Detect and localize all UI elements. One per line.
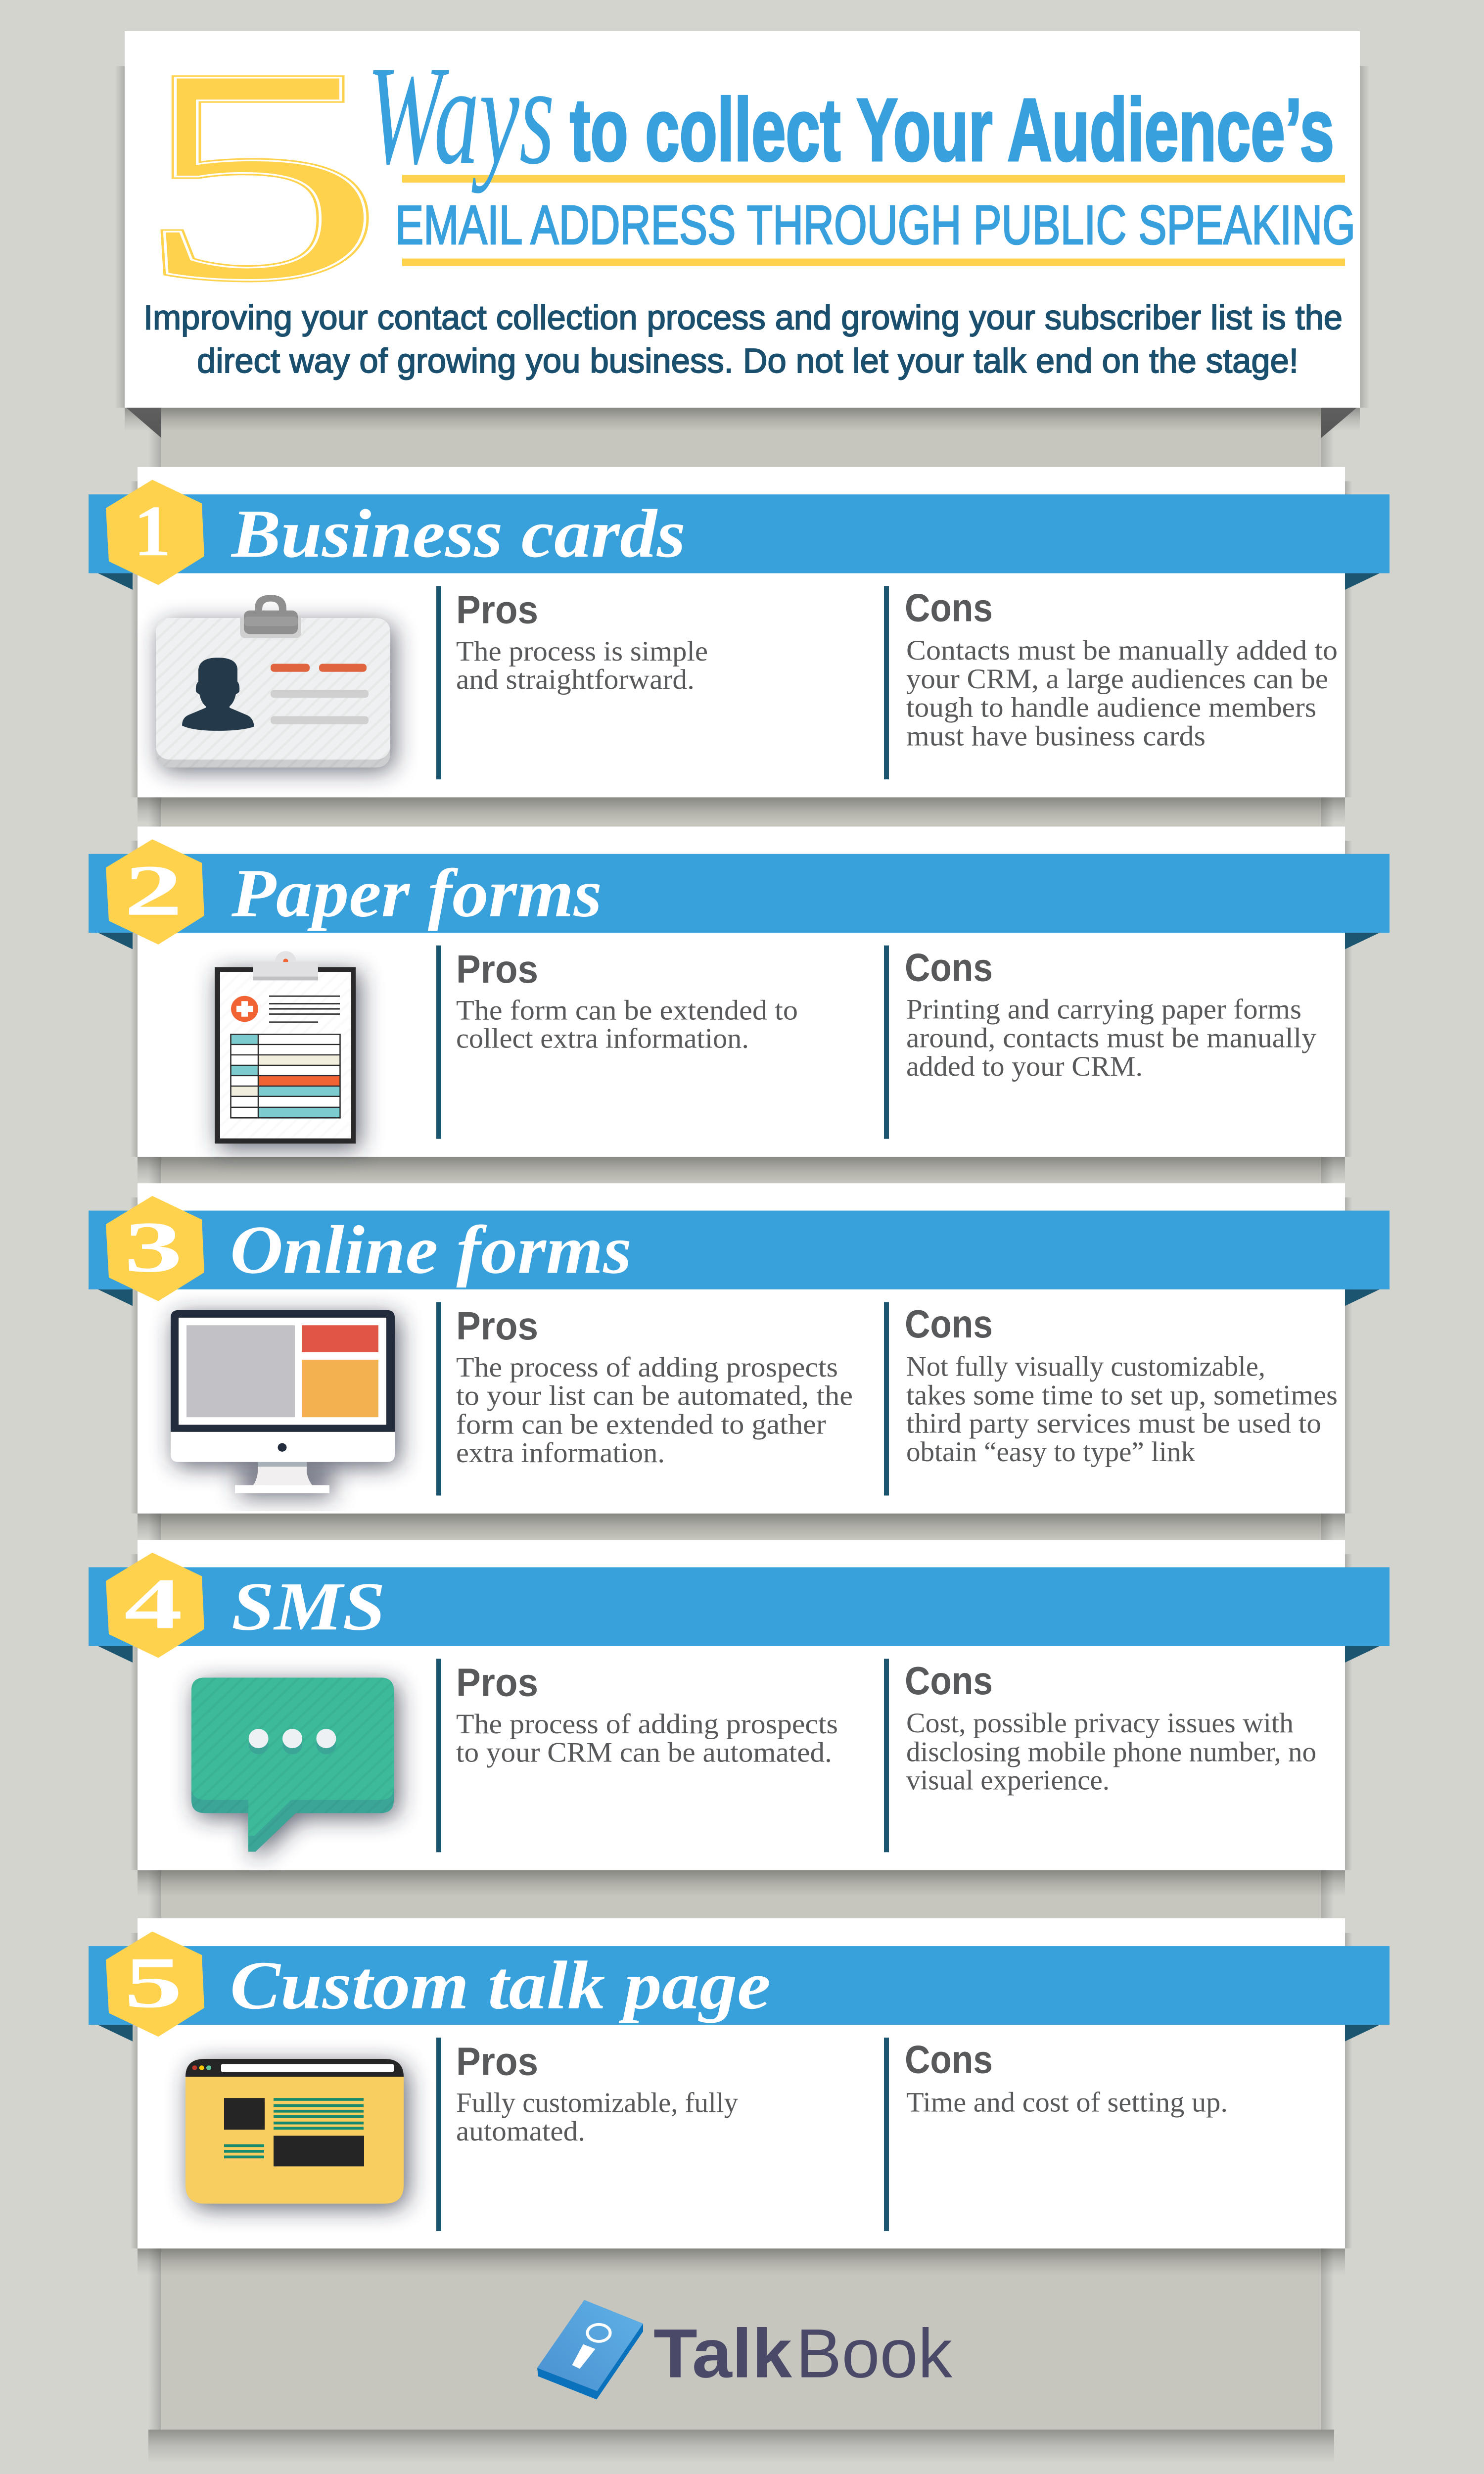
icon: browser window — [186, 2059, 408, 2208]
back column — [148, 71, 1334, 2463]
ribbon fold right — [1345, 2025, 1380, 2042]
cons text: added to your CRM. — [906, 1050, 1143, 1082]
panel: SMS — [89, 1540, 1390, 1897]
pros heading: Pros — [456, 1304, 538, 1348]
cons text: tough to handle audience members — [906, 692, 1316, 723]
icon: desktop monitor — [171, 1310, 399, 1498]
panel: online forms — [89, 1183, 1390, 1540]
cons text: Time and cost of setting up. — [906, 2087, 1228, 2118]
section title: Online forms — [230, 1212, 632, 1288]
number 4: 4 — [124, 1564, 183, 1644]
pros divider — [436, 1302, 441, 1496]
card background — [138, 1540, 1345, 1870]
cons divider — [884, 1659, 889, 1852]
cons heading: Cons — [905, 2038, 993, 2082]
header panel — [115, 6, 1370, 438]
cons heading: Cons — [905, 1302, 993, 1346]
pros text: Fully customizable, fully — [456, 2087, 739, 2118]
number hexagon — [106, 1196, 204, 1301]
pros text: to your list can be automated, the — [456, 1380, 853, 1411]
number hexagon — [106, 1553, 204, 1658]
cons text — [906, 1351, 1338, 1468]
pros text: automated. — [456, 2115, 585, 2147]
cons text: your CRM, a large audiences can be — [906, 663, 1328, 695]
cons text — [906, 634, 1338, 752]
pros heading: Pros — [456, 948, 538, 992]
ribbon fold left — [98, 1646, 133, 1663]
banner — [89, 1567, 1390, 1646]
panel: custom talk page — [89, 1918, 1390, 2275]
icon: clipboard form — [215, 951, 360, 1148]
cons text: Cost, possible privacy issues with — [906, 1707, 1294, 1739]
pros text: The form can be extended to — [456, 995, 798, 1026]
card background — [138, 1183, 1345, 1514]
yellow rule bottom — [402, 259, 1345, 266]
cons text: visual experience. — [906, 1764, 1110, 1796]
banner — [89, 494, 1390, 573]
header background — [125, 31, 1360, 408]
pros heading: Pros — [456, 1661, 538, 1705]
pros text: The process of adding prospects — [456, 1708, 838, 1740]
banner — [89, 854, 1390, 933]
pros text: The process of adding prospects — [456, 1351, 838, 1383]
ribbon fold left — [98, 2025, 133, 2042]
pros heading: Pros — [456, 2040, 538, 2084]
pros text: collect extra information. — [456, 1023, 749, 1054]
logo: TalkBook — [537, 2300, 953, 2399]
number 3: 3 — [124, 1207, 183, 1287]
number hexagon — [106, 1932, 204, 2037]
cons heading: Cons — [905, 586, 993, 630]
cons text: takes some time to set up, sometimes — [906, 1380, 1338, 1411]
cons divider — [884, 2038, 889, 2231]
pros text: form can be extended to gather — [456, 1409, 826, 1440]
pros text: extra information. — [456, 1437, 665, 1468]
title word: Ways: Ways — [367, 37, 555, 194]
section title: Paper forms — [231, 855, 602, 931]
banner — [89, 1211, 1390, 1289]
cons text: must have business cards — [906, 720, 1206, 752]
cons text — [906, 1707, 1316, 1796]
pros text: and straightforward. — [456, 664, 695, 695]
yellow rule top — [402, 175, 1345, 183]
cons divider — [884, 946, 889, 1139]
number hexagon — [106, 839, 204, 945]
cons text: Not fully visually customizable, — [906, 1351, 1265, 1382]
pros text: The process is simple — [456, 635, 708, 667]
panel: business cards — [89, 467, 1390, 824]
logo wordmark: Talk — [653, 2315, 792, 2392]
icon: chat bubble — [191, 1678, 398, 1856]
pros heading: Pros — [456, 588, 538, 632]
number 5: 5 — [124, 1942, 183, 2023]
pros text — [456, 635, 708, 695]
ribbon fold right — [1345, 1646, 1380, 1663]
pros text: to your CRM can be automated. — [456, 1737, 832, 1768]
cons text: Contacts must be manually added to — [906, 634, 1338, 666]
number 2: 2 — [124, 850, 183, 931]
section title: SMS — [232, 1568, 385, 1645]
pros text — [456, 1351, 853, 1468]
cons text: disclosing mobile phone number, no — [906, 1736, 1316, 1767]
panel: paper forms — [89, 826, 1390, 1183]
right header fold — [1321, 408, 1357, 438]
banner — [89, 1946, 1390, 2025]
section title: Business cards — [231, 495, 686, 571]
ribbon fold right — [1345, 933, 1380, 949]
icon: ID badge — [156, 595, 394, 771]
pros divider — [436, 586, 441, 779]
ribbon fold right — [1345, 1289, 1380, 1306]
pros divider — [436, 1659, 441, 1852]
cons heading: Cons — [905, 1659, 993, 1703]
cons divider — [884, 1302, 889, 1496]
logo wordmark: Book — [796, 2315, 953, 2392]
big number 5: 5 — [136, 6, 384, 343]
ribbon fold left — [98, 1289, 133, 1306]
cons text: third party services must be used to — [906, 1408, 1321, 1439]
cons text — [906, 994, 1317, 1082]
pros text — [456, 2087, 739, 2147]
ribbon fold left — [98, 573, 133, 590]
card background — [138, 1918, 1345, 2248]
pros divider — [436, 2038, 441, 2231]
intro line 1: Improving your contact collection process and growing your subscriber list is the — [143, 298, 1343, 337]
number hexagon — [106, 480, 204, 585]
cons divider — [884, 586, 889, 779]
pros text — [456, 995, 798, 1054]
section title: Custom talk page — [230, 1947, 771, 2023]
big number 5: 5 — [136, 6, 384, 343]
cons text: Printing and carrying paper forms — [906, 994, 1301, 1025]
logo icon: book — [537, 2300, 643, 2399]
ribbon fold left — [98, 933, 133, 949]
ribbon fold right — [1345, 573, 1380, 590]
intro line 2: direct way of growing you business. Do not let your talk end on the stage! — [197, 342, 1298, 381]
pros divider — [436, 946, 441, 1139]
card background — [138, 826, 1345, 1157]
pros text — [456, 1708, 838, 1768]
cons heading: Cons — [905, 946, 993, 990]
number 1: 1 — [134, 490, 171, 571]
card background — [138, 467, 1345, 797]
left header fold — [126, 408, 161, 438]
cons text: around, contacts must be manually — [906, 1022, 1317, 1053]
cons text: obtain “easy to type” link — [906, 1436, 1196, 1468]
